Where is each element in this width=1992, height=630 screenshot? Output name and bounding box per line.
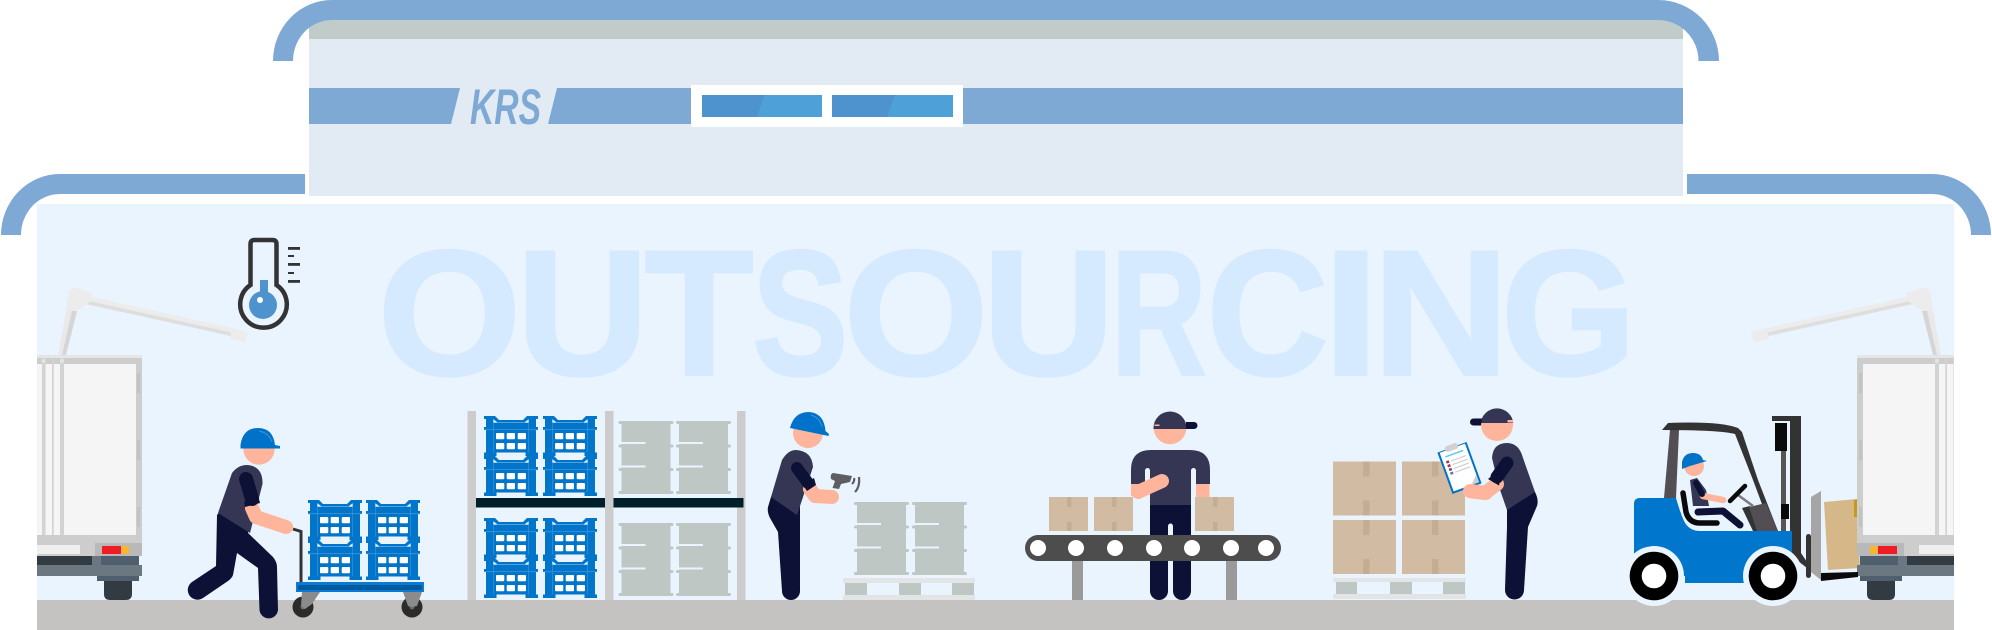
upper roof [273, 0, 1719, 61]
front wheel [1743, 546, 1803, 606]
crates on trolley [308, 500, 420, 580]
worker with clipboard [1436, 408, 1538, 600]
OUTSOURCING heading: R [1111, 214, 1207, 412]
boxes on conveyor [1049, 497, 1234, 531]
crates on shelves [484, 416, 597, 598]
warehouse interior background [37, 204, 1954, 600]
forklift [1624, 416, 1858, 606]
figure [188, 428, 286, 618]
floor [37, 600, 1954, 630]
pallet of drums [843, 502, 975, 600]
OUTSOURCING heading: U [516, 214, 649, 412]
conveyor belt [1025, 535, 1281, 600]
icon: thermometer [240, 240, 300, 328]
clipboard [1436, 439, 1482, 494]
forklift mast [1772, 416, 1807, 568]
OUTSOURCING heading: I [1323, 214, 1379, 412]
KRS logo: KRS [470, 79, 541, 135]
facade stripe [309, 88, 1683, 124]
OUTSOURCING heading: N [1373, 214, 1509, 412]
OUTSOURCING heading: O [844, 214, 988, 412]
truck left [37, 355, 142, 600]
lower roof left [1, 174, 305, 235]
rear wheel [1624, 546, 1684, 606]
conveyor worker [1131, 412, 1210, 600]
worker with barcode scanner [768, 412, 859, 600]
OUTSOURCING heading: G [1501, 214, 1636, 412]
forklift box load [1824, 499, 1860, 570]
OUTSOURCING heading: S [752, 214, 848, 412]
lamp right [1751, 288, 1941, 355]
upper building facade [309, 20, 1683, 196]
forklift fork [1806, 491, 1858, 581]
forklift body [1634, 498, 1792, 583]
OUTSOURCING heading: O [378, 214, 521, 412]
worker pushing cart [188, 428, 424, 618]
lower roof right [1687, 174, 1991, 235]
truck right [1857, 355, 1962, 600]
forklift driver [1682, 453, 1740, 525]
OUTSOURCING heading: C [1207, 214, 1328, 412]
drums on shelves [618, 421, 731, 596]
forklift cab frame [1662, 423, 1778, 531]
upper window [691, 85, 963, 127]
stacked boxes on pallet [1333, 462, 1466, 599]
racking shelves [468, 411, 746, 600]
trolley [292, 529, 424, 618]
icon: barcode scanner [831, 473, 859, 492]
OUTSOURCING heading: T [645, 214, 753, 412]
lamp left [58, 288, 248, 355]
OUTSOURCING heading: U [982, 214, 1115, 412]
